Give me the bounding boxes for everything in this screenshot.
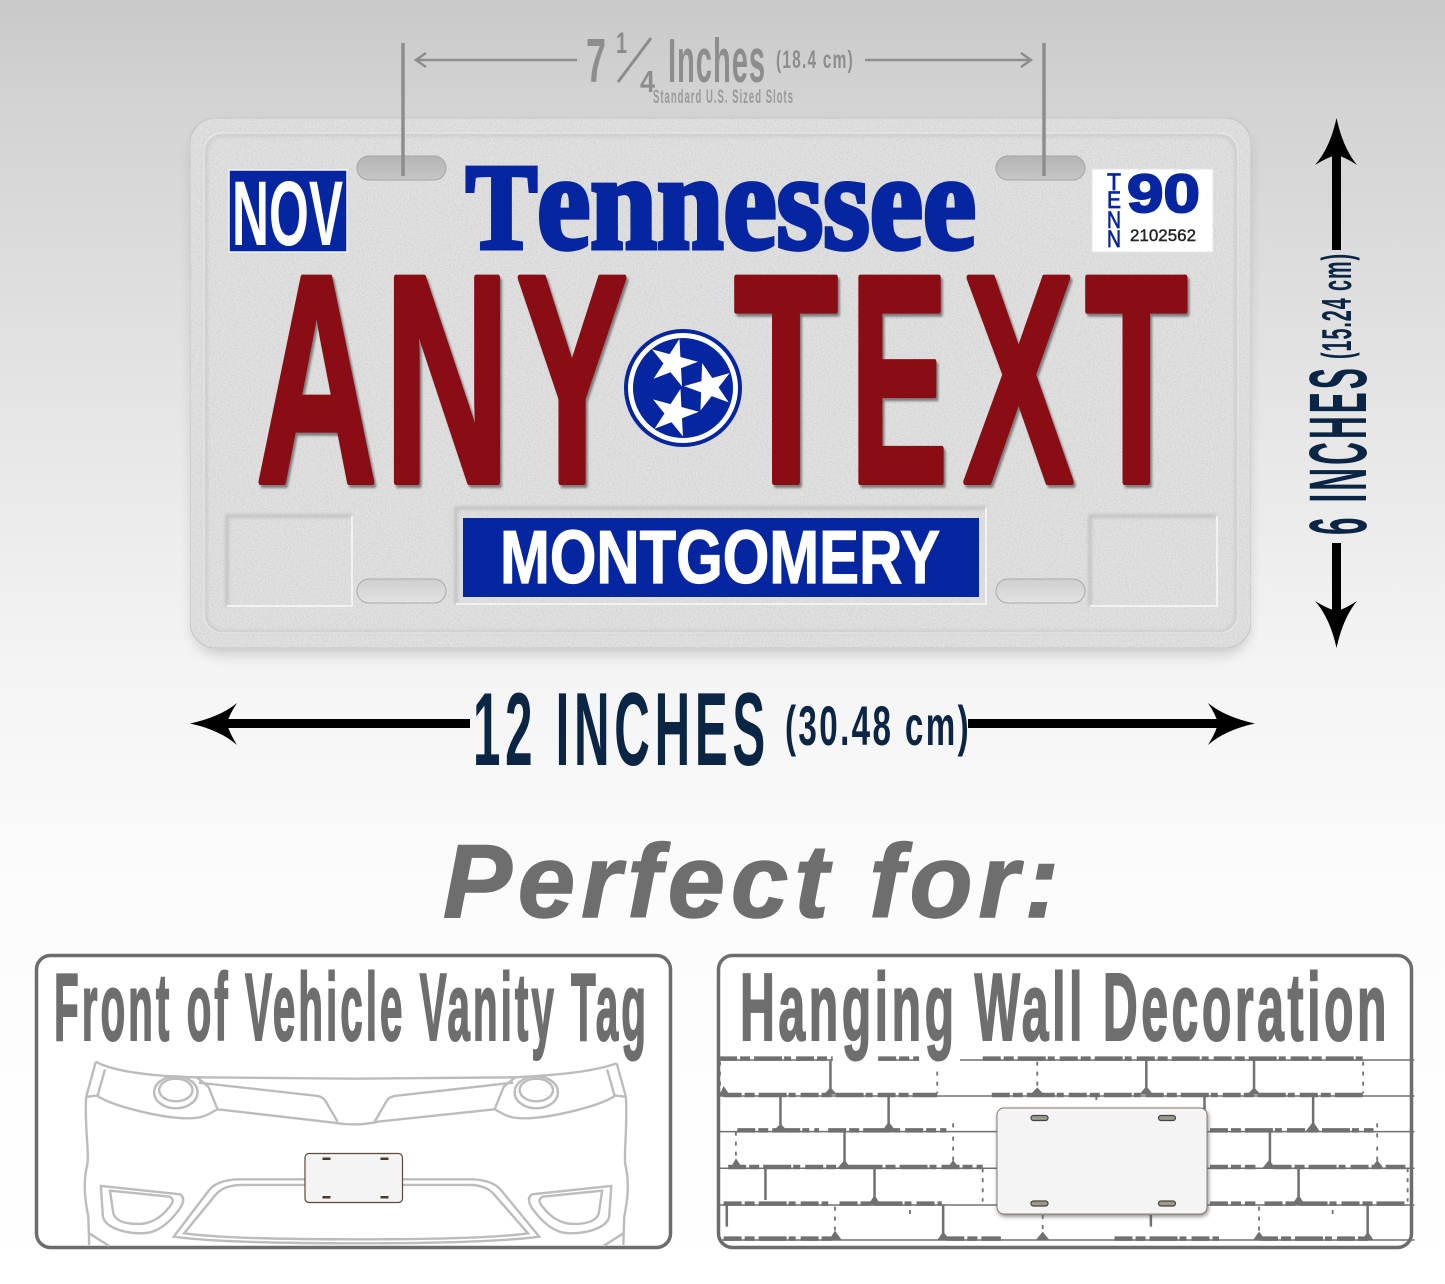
embossed sticker wells [227, 508, 1217, 606]
plate text ANY TEXT: T [734, 213, 838, 545]
mounting slots [357, 156, 1085, 603]
infographic canvas: Front of Vehicle Vanity Tag [54, 954, 649, 1061]
plate text ANY TEXT: E [850, 213, 948, 545]
width label: (30.48 cm) [785, 694, 971, 757]
year sticker: 90 [1127, 164, 1200, 224]
width arrow [190, 703, 1255, 745]
slot width label: (18.4 cm) [776, 46, 854, 74]
plate shadow [194, 126, 1248, 654]
month sticker NOV: NOV [232, 163, 343, 265]
height dimension: (15.24 cm) [1313, 253, 1360, 359]
heading: Perfect for: Perfect for: [443, 824, 1065, 940]
license plate [190, 118, 1251, 654]
slot width label [586, 27, 854, 108]
height label [1293, 253, 1384, 535]
year sticker: E [1107, 187, 1121, 214]
year sticker: 2102562 [1130, 226, 1196, 245]
plate text ANY TEXT: X [964, 213, 1074, 545]
plate text ANY TEXT: Y [516, 213, 628, 545]
plate text ANY TEXT: T [1085, 213, 1188, 545]
slot width label: Inches [668, 27, 766, 96]
year sticker: N [1107, 226, 1121, 253]
Tennessee heading: Tennessee [466, 126, 976, 278]
mini plate on car [305, 1154, 402, 1202]
car front illustration [85, 1062, 628, 1246]
slot width label: 4 [640, 64, 656, 99]
plate body [190, 118, 1251, 648]
width label: 12 INCHES [473, 672, 770, 788]
slot width arrow [416, 53, 1031, 67]
panel: wall decoration [718, 954, 1414, 1248]
panel frame [718, 956, 1412, 1248]
mini plate on wall [997, 1108, 1207, 1214]
slot width label: Standard U.S. Sized Slots [653, 87, 794, 108]
plate text ANY TEXT: A [256, 213, 377, 545]
month sticker NOV [229, 163, 347, 265]
height arrow [1315, 118, 1357, 648]
brick wall illustration [719, 1059, 1414, 1240]
year sticker [1092, 164, 1213, 253]
plate text ANY TEXT: N [384, 213, 510, 545]
slot width label: 7 [586, 27, 606, 96]
panel frame [36, 956, 670, 1248]
plate text ANY TEXT [256, 213, 1188, 545]
embossed plate border [204, 133, 1238, 633]
slot guide lines [403, 43, 1044, 176]
panel: front of vehicle [36, 954, 670, 1248]
tri-star seal [624, 329, 742, 447]
year sticker: N [1107, 207, 1121, 234]
width dimension [190, 672, 1255, 788]
height dimension [1293, 118, 1384, 648]
slot width dimension [403, 27, 1044, 176]
slot width label: 1 [616, 27, 627, 60]
height label: 6 INCHES [1293, 365, 1384, 535]
year sticker: T [1107, 169, 1121, 196]
county banner MONTGOMERY: MONTGOMERY [500, 515, 940, 599]
